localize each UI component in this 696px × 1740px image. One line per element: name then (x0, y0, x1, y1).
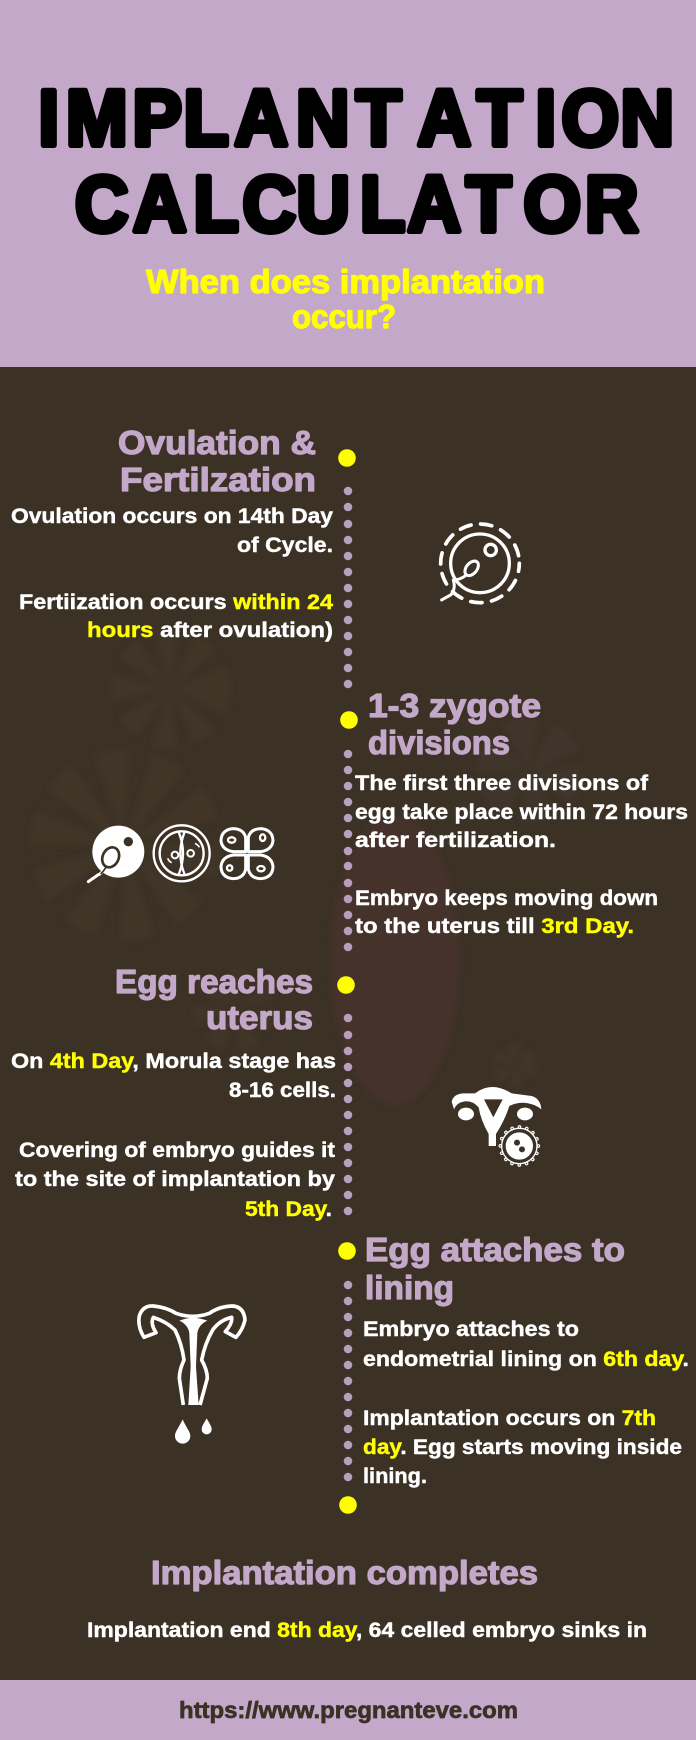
footer (0, 1680, 696, 1740)
footer url: https://www.pregnanteve.com (179, 1697, 518, 1723)
title: IMPLANTATION (38, 75, 674, 163)
panel: ovulation and fertilization (11, 424, 333, 642)
heading: zygote divisions: 1-3 zygote (368, 687, 541, 724)
panel: egg attaches to lining (363, 1231, 689, 1488)
heading: egg attaches to lining: lining (365, 1269, 454, 1306)
text: ovulation and fertilization details: of Cycle. (237, 534, 333, 557)
heading: egg attaches to lining (365, 1231, 625, 1306)
text: morula stage details: 8-16 cells. (229, 1079, 336, 1102)
heading: ovulation and fertilization: Ovulation & (118, 424, 316, 461)
heading: egg reaches uterus (115, 963, 313, 1036)
text: attachment and implantation details: Implantation occurs on 7th (363, 1407, 656, 1430)
subtitle: When does implantation (146, 263, 545, 300)
panel: zygote divisions (355, 687, 688, 938)
text: attachment and implantation details (363, 1318, 689, 1488)
title (38, 75, 674, 249)
text: zygote division details: Embryo keeps moving down (355, 887, 658, 910)
header panel (0, 0, 696, 367)
icon: cell division stages (88, 825, 273, 882)
text: ovulation and fertilization details: hours after ovulation) (87, 619, 333, 642)
text: morula stage details: to the site of implantation by (15, 1168, 335, 1191)
panel: egg reaches uterus (11, 963, 336, 1221)
heading: egg attaches to lining: Egg attaches to (365, 1231, 625, 1268)
heading: ovulation and fertilization: Fertilzation (120, 461, 316, 498)
text: ovulation and fertilization details (11, 505, 333, 642)
text: zygote division details: after fertilization. (355, 829, 556, 852)
text: morula stage details: On 4th Day , Morula stage has (11, 1050, 336, 1073)
text: attachment and implantation details: endometrial lining on 6th day . (363, 1348, 689, 1371)
text: zygote division details: egg take place within 72 hours (355, 801, 688, 824)
text: morula stage details: 5th Day . (245, 1198, 332, 1221)
text: ovulation and fertilization details: Fertiization occurs within 24 (19, 591, 333, 614)
text: attachment and implantation details: lining. (363, 1465, 427, 1488)
heading: egg reaches uterus: uterus (206, 999, 313, 1036)
text: morula stage details: Covering of embryo guides it (19, 1139, 335, 1162)
title: CALCULATOR (75, 161, 638, 249)
background watermark: flowers and silhouette (77, 659, 558, 1105)
heading: ovulation and fertilization (118, 424, 316, 498)
heading: zygote divisions: divisions (368, 724, 510, 761)
text: attachment and implantation details: day. Egg starts moving inside (363, 1436, 682, 1459)
text: morula stage details (11, 1050, 336, 1221)
heading: zygote divisions (368, 687, 541, 761)
text: zygote division details: The first three divisions of (355, 772, 649, 795)
text: implantation end details: Implantation end 8th day , 64 celled embryo sinks in (87, 1619, 647, 1642)
text: zygote division details (355, 772, 688, 938)
text: attachment and implantation details: Embryo attaches to (363, 1318, 579, 1341)
text: ovulation and fertilization details: Ovulation occurs on 14th Day (11, 505, 333, 528)
text: zygote division details: to the uterus till 3rd Day. (355, 915, 634, 938)
icon: sperm entering egg (441, 524, 519, 603)
panel: implantation completes (87, 1554, 647, 1642)
timeline: dotted line and markers (337, 449, 358, 1514)
heading: implantation completes: Implantation completes (151, 1554, 538, 1591)
subtitle: occur? (292, 298, 396, 335)
heading: egg reaches uterus: Egg reaches (115, 963, 313, 1000)
icon: uterus with droplets (139, 1306, 245, 1444)
subtitle (146, 263, 545, 335)
icon: uterus with embryo (452, 1087, 542, 1169)
